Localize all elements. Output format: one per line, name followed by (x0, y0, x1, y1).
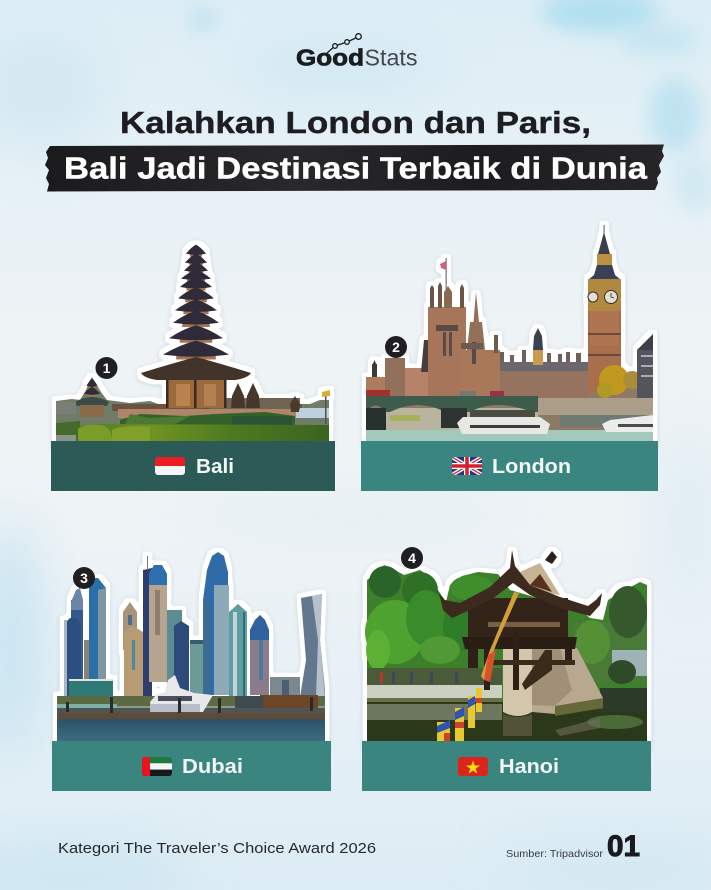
panel: London (361, 225, 658, 491)
title line 1: Kalahkan London dan Paris, (120, 106, 591, 140)
label bar (362, 741, 651, 791)
icon: line graph (327, 34, 361, 53)
illustration: Balinese pagoda (56, 245, 330, 445)
label bar (361, 441, 658, 491)
badge 4 (401, 547, 423, 569)
flag: Vietnam (458, 757, 488, 776)
panel: Dubai (52, 552, 331, 791)
footer: source: Sumber: Tripadvisor (506, 848, 604, 860)
label: Hanoi: Hanoi (499, 756, 559, 778)
label bar (52, 741, 331, 791)
footer: page number: 01 (607, 830, 640, 863)
logo: GoodStats: Good (296, 44, 364, 70)
logo: GoodStats (296, 34, 418, 70)
flag: UAE (142, 757, 172, 776)
badge 4: 4 (408, 550, 416, 566)
flag: Indonesia (155, 457, 185, 475)
flag: UK (452, 457, 482, 475)
illustration: Dubai marina (57, 552, 325, 745)
title banner (45, 144, 664, 192)
panel: Bali (51, 245, 335, 491)
panel: Hanoi (362, 547, 651, 791)
illustration: Westminster (366, 225, 653, 445)
label bar (51, 441, 335, 491)
torn tape (45, 144, 664, 192)
label: London: London (492, 456, 571, 478)
logo: GoodStats: Stats (364, 44, 418, 70)
label: Dubai: Dubai (182, 756, 243, 778)
title line 2: Bali Jadi Destinasi Terbaik di Dunia (64, 152, 648, 186)
label: Bali: Bali (196, 456, 234, 478)
badge 3 (73, 567, 95, 589)
badge 3: 3 (80, 570, 88, 586)
badge 2 (385, 336, 407, 358)
badge 1: 1 (103, 360, 111, 376)
footer: category note: Kategori The Traveler’s Choice Award 2026 (58, 841, 376, 857)
badge 2: 2 (392, 339, 400, 355)
illustration: One Pillar Pagoda (365, 550, 647, 745)
badge 1 (96, 357, 118, 379)
